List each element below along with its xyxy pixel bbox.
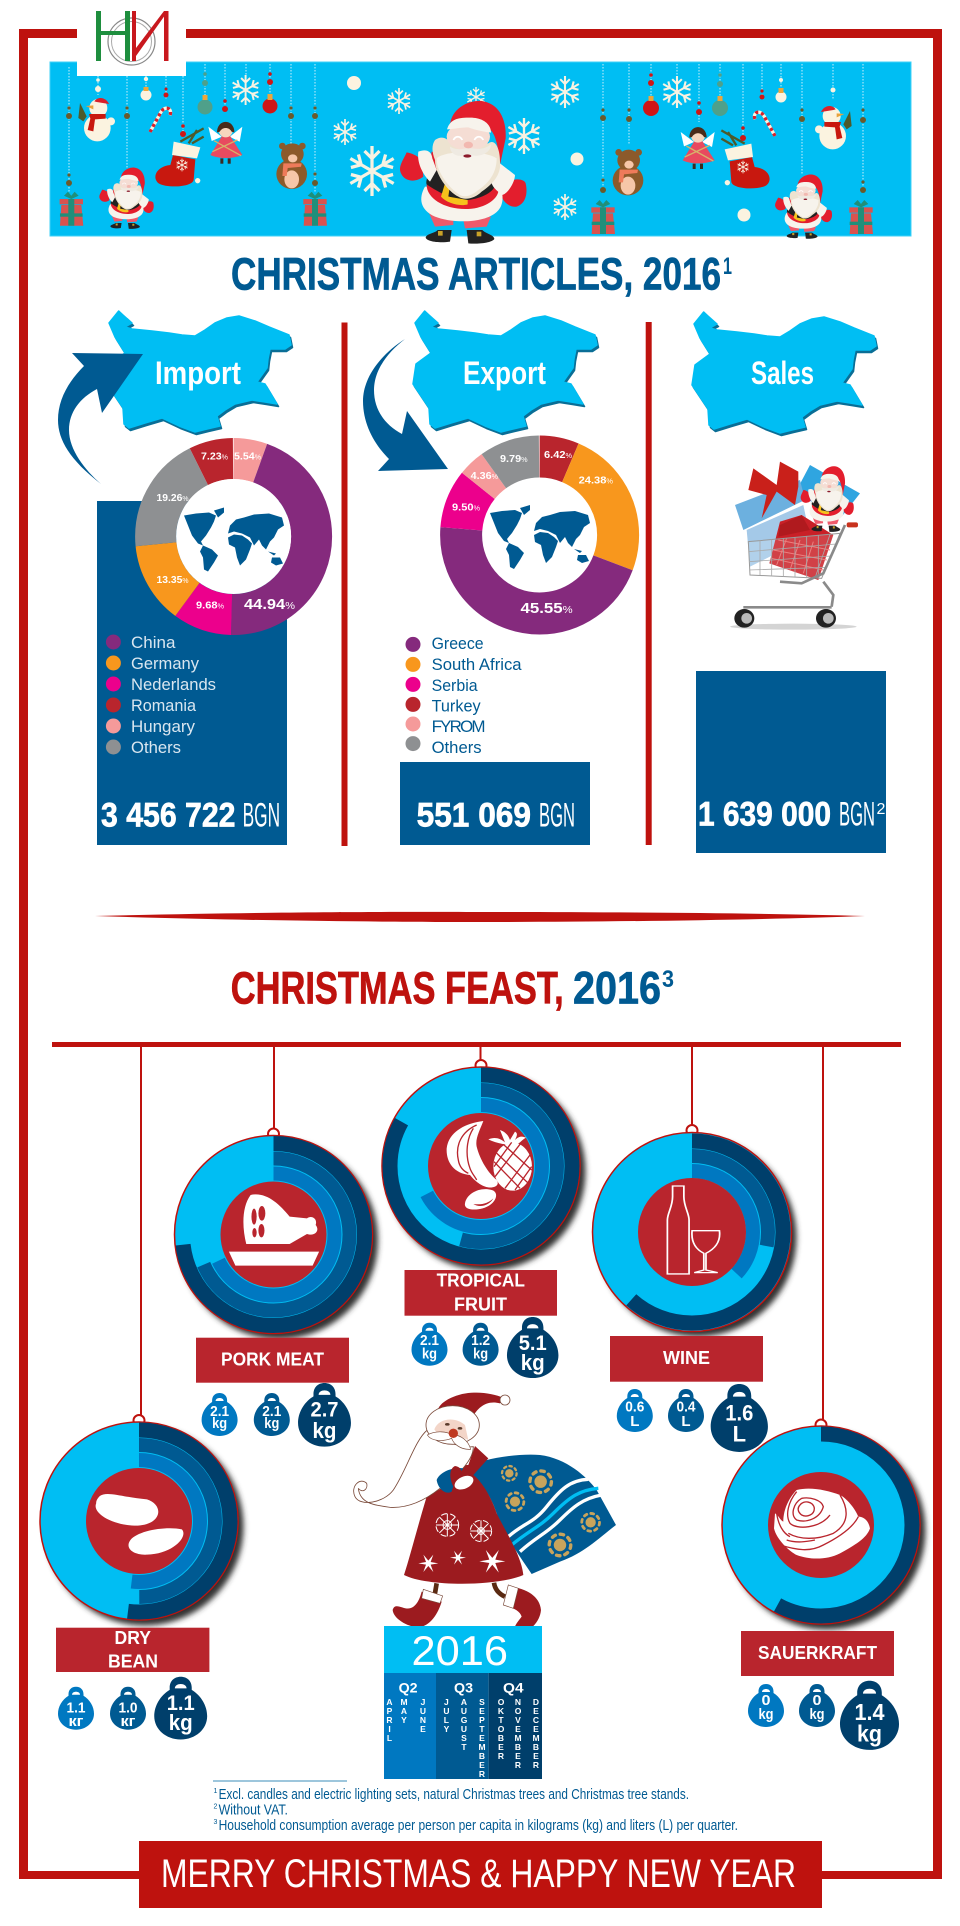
divider between import and export — [342, 322, 348, 846]
export legend — [406, 634, 522, 757]
greeting banner: MERRY CHRISTMAS & HAPPY NEW YEAR — [161, 1852, 796, 1896]
export legend: Greece — [432, 634, 484, 653]
sales value box: BGN — [839, 796, 875, 834]
weights: dry bean: 1.1 — [167, 1692, 195, 1715]
footnotes: Household consumption average per person per capita in kilograms (kg) and liters (L) per quarter. — [219, 1817, 738, 1834]
logo — [77, 0, 186, 76]
weights: sauerkraut: kg — [857, 1721, 882, 1747]
label: dry bean: DRY — [114, 1628, 151, 1648]
year heading: 2016 — [412, 1627, 508, 1674]
export legend: FYROM — [432, 717, 486, 736]
import heading: Import — [155, 355, 241, 391]
weights: sauerkraut: kg — [758, 1706, 774, 1723]
weights: wine: L — [681, 1413, 691, 1430]
import donut labels: 19.26% — [156, 492, 188, 504]
icon: shopping cart with gifts and Santa — [730, 462, 860, 630]
footnotes: 3 — [214, 1819, 218, 1826]
label: sauerkraut: SAUERKRAFT — [758, 1643, 877, 1663]
weights: pork meat: kg — [312, 1418, 336, 1443]
weights: dry bean: кг — [68, 1713, 84, 1730]
weights: wine: L — [733, 1422, 746, 1447]
sales value box — [696, 671, 886, 853]
quarter columns: OKTOBER — [498, 1697, 505, 1761]
quarter columns: JULY — [443, 1697, 450, 1734]
weights: wine: L — [630, 1413, 639, 1430]
import donut labels: 7.23% — [201, 450, 228, 462]
label: wine — [610, 1336, 763, 1382]
export donut labels: 9.79% — [500, 453, 528, 465]
label: dry bean — [56, 1628, 209, 1672]
import donut labels: 9.68% — [196, 600, 224, 612]
sales heading: Sales — [751, 355, 814, 391]
import legend: China — [131, 633, 176, 652]
panel: sales — [692, 312, 886, 853]
weights: wine: 0.4 — [676, 1399, 696, 1416]
arrow: into Bulgaria — [58, 353, 143, 484]
footnotes — [213, 1780, 738, 1834]
weights: pork meat: 2.1 — [262, 1403, 281, 1420]
label: tropical fruit: TROPICAL — [437, 1271, 525, 1291]
weights: pork meat: kg — [264, 1415, 279, 1432]
weights: dry bean — [58, 1677, 207, 1739]
export donut labels: 6.42% — [544, 449, 572, 461]
label: pork meat — [196, 1338, 349, 1383]
icon: world map — [490, 505, 590, 569]
quarter columns: AUGUST — [461, 1697, 468, 1752]
weights: pork meat: 2.7 — [310, 1399, 338, 1422]
title: Christmas feast: CHRISTMAS FEAST, — [231, 962, 564, 1013]
section divider — [95, 912, 865, 922]
label: dry bean: BEAN — [108, 1652, 158, 1672]
export value box: 551 069 — [417, 796, 531, 834]
title: Christmas feast: 2016 — [573, 962, 661, 1013]
label: sauerkraut — [741, 1631, 894, 1676]
import legend: Others — [131, 738, 181, 757]
import legend: Nederlands — [131, 675, 216, 694]
footnotes: 1 — [214, 1788, 218, 1795]
quarter columns: SEPTEMBER — [478, 1697, 486, 1779]
export value box: BGN — [539, 796, 575, 834]
weights: dry bean: kg — [169, 1710, 193, 1735]
weights: tropical fruit: kg — [422, 1346, 437, 1362]
export donut labels: 4.36% — [471, 470, 498, 482]
weights: tropical fruit: 5.1 — [519, 1332, 547, 1355]
panel: 2016 quarter key — [384, 1626, 542, 1779]
export donut labels — [452, 449, 613, 617]
icon: world map — [184, 508, 284, 572]
arrow: out of Bulgaria — [363, 339, 448, 471]
weights: tropical fruit: kg — [521, 1350, 545, 1375]
title: Christmas feast: 3 — [662, 966, 674, 993]
export heading: Export — [463, 355, 546, 391]
export donut labels: 45.55 % — [520, 600, 573, 617]
import donut labels: 44.94 % — [244, 596, 295, 613]
quarter columns: MAY — [400, 1697, 408, 1725]
ornament: pork meat rings — [174, 1128, 378, 1339]
title: Christmas articles: CHRISTMAS ARTICLES, 2016 — [231, 248, 721, 300]
weights: tropical fruit: 2.1 — [420, 1332, 439, 1349]
sales value box: 1 639 000 — [698, 796, 831, 834]
ornament hanger bar — [52, 1042, 901, 1426]
panel: pork meat — [174, 1128, 378, 1447]
panel: dry bean — [40, 1415, 244, 1739]
weights: tropical fruit: kg — [473, 1346, 488, 1362]
donut chart: export by country — [461, 456, 618, 614]
import legend — [106, 633, 216, 757]
banner: Christmas decorations — [50, 62, 911, 244]
greeting banner — [139, 1841, 822, 1908]
quarter columns: Q2 — [399, 1680, 418, 1696]
ornament: dry bean rings — [40, 1415, 244, 1626]
weights: wine: 0.6 — [625, 1399, 644, 1416]
sales value box: 2 — [876, 801, 886, 818]
import legend: Hungary — [131, 717, 195, 736]
icon: cabbage — [774, 1489, 870, 1559]
weights: dry bean: кг — [120, 1713, 136, 1730]
quarter columns: APRIL — [386, 1697, 393, 1743]
ornament: tropical fruit rings — [382, 1060, 586, 1270]
import donut labels — [156, 450, 295, 613]
weights: pork meat: kg — [212, 1415, 227, 1432]
label: tropical fruit: FRUIT — [454, 1295, 507, 1315]
icon: ham on plate — [229, 1194, 319, 1266]
title: Christmas articles: 1 — [723, 253, 732, 280]
label: pork meat: PORK MEAT — [221, 1350, 324, 1370]
export donut labels: 9.50% — [452, 502, 480, 514]
divider between export and sales — [646, 322, 652, 845]
quarter columns: JUNE — [420, 1697, 426, 1734]
weights: tropical fruit: 1.2 — [471, 1332, 490, 1349]
weights: sauerkraut: 0 — [762, 1692, 770, 1709]
icon: wine bottle and glass — [667, 1186, 720, 1274]
export legend: Serbia — [432, 676, 478, 695]
weights: dry bean: 1.1 — [66, 1700, 86, 1717]
import value box — [97, 501, 287, 845]
quarter columns: Q4 — [503, 1680, 524, 1696]
panel: export — [363, 311, 618, 845]
export donut labels: 24.38% — [579, 474, 613, 486]
export value box — [400, 762, 590, 845]
weights: sauerkraut — [748, 1681, 899, 1750]
weights: pork meat — [202, 1383, 351, 1447]
weights: wine — [617, 1384, 768, 1452]
weights: tropical fruit — [412, 1317, 558, 1378]
footnotes: 2 — [214, 1804, 218, 1810]
import legend: Romania — [131, 696, 197, 715]
year heading — [384, 1626, 542, 1674]
export legend: Others — [432, 738, 482, 757]
weights: sauerkraut: kg — [810, 1706, 824, 1723]
panel: import — [58, 311, 312, 845]
import donut labels: 13.35% — [156, 574, 188, 586]
ornament: sauerkraut rings — [722, 1420, 926, 1630]
quarter columns: DECEMBER — [532, 1697, 540, 1770]
map: Bulgaria sales — [692, 312, 878, 436]
label: wine: WINE — [663, 1348, 710, 1368]
weights: sauerkraut: 0 — [812, 1692, 822, 1709]
panel: sauerkraut — [722, 1420, 926, 1750]
export legend: South Africa — [432, 655, 522, 674]
ornament: wine rings — [592, 1125, 796, 1336]
map: Bulgaria import — [107, 311, 292, 434]
weights: pork meat: 2.1 — [210, 1403, 229, 1420]
weights: dry bean: 1.0 — [118, 1700, 138, 1717]
quarter columns: NOVEMBER — [514, 1697, 522, 1770]
weights: sauerkraut: 1.4 — [854, 1699, 885, 1725]
icon: tropical fruit — [447, 1121, 532, 1210]
map: Bulgaria export — [413, 311, 598, 434]
icon: beans — [96, 1494, 183, 1555]
import value: 3 456 722 — [101, 796, 236, 834]
import legend: Germany — [131, 654, 199, 673]
footnotes: Without VAT. — [219, 1801, 288, 1818]
import value: BGN — [243, 796, 280, 834]
panel: tropical fruit — [382, 1060, 586, 1378]
quarter columns — [384, 1673, 542, 1779]
panel: wine — [592, 1125, 796, 1452]
illustration: Santa with sack — [354, 1393, 616, 1633]
weights: wine: 1.6 — [725, 1401, 753, 1426]
label: tropical fruit — [404, 1270, 557, 1316]
donut chart: import by country — [156, 458, 312, 614]
quarter columns: Q3 — [454, 1680, 473, 1696]
export legend: Turkey — [432, 696, 481, 716]
import donut labels: 5.54% — [234, 450, 261, 462]
footnotes: Excl. candles and electric lighting sets, natural Christmas trees and Christmas tree stands. — [219, 1786, 689, 1803]
